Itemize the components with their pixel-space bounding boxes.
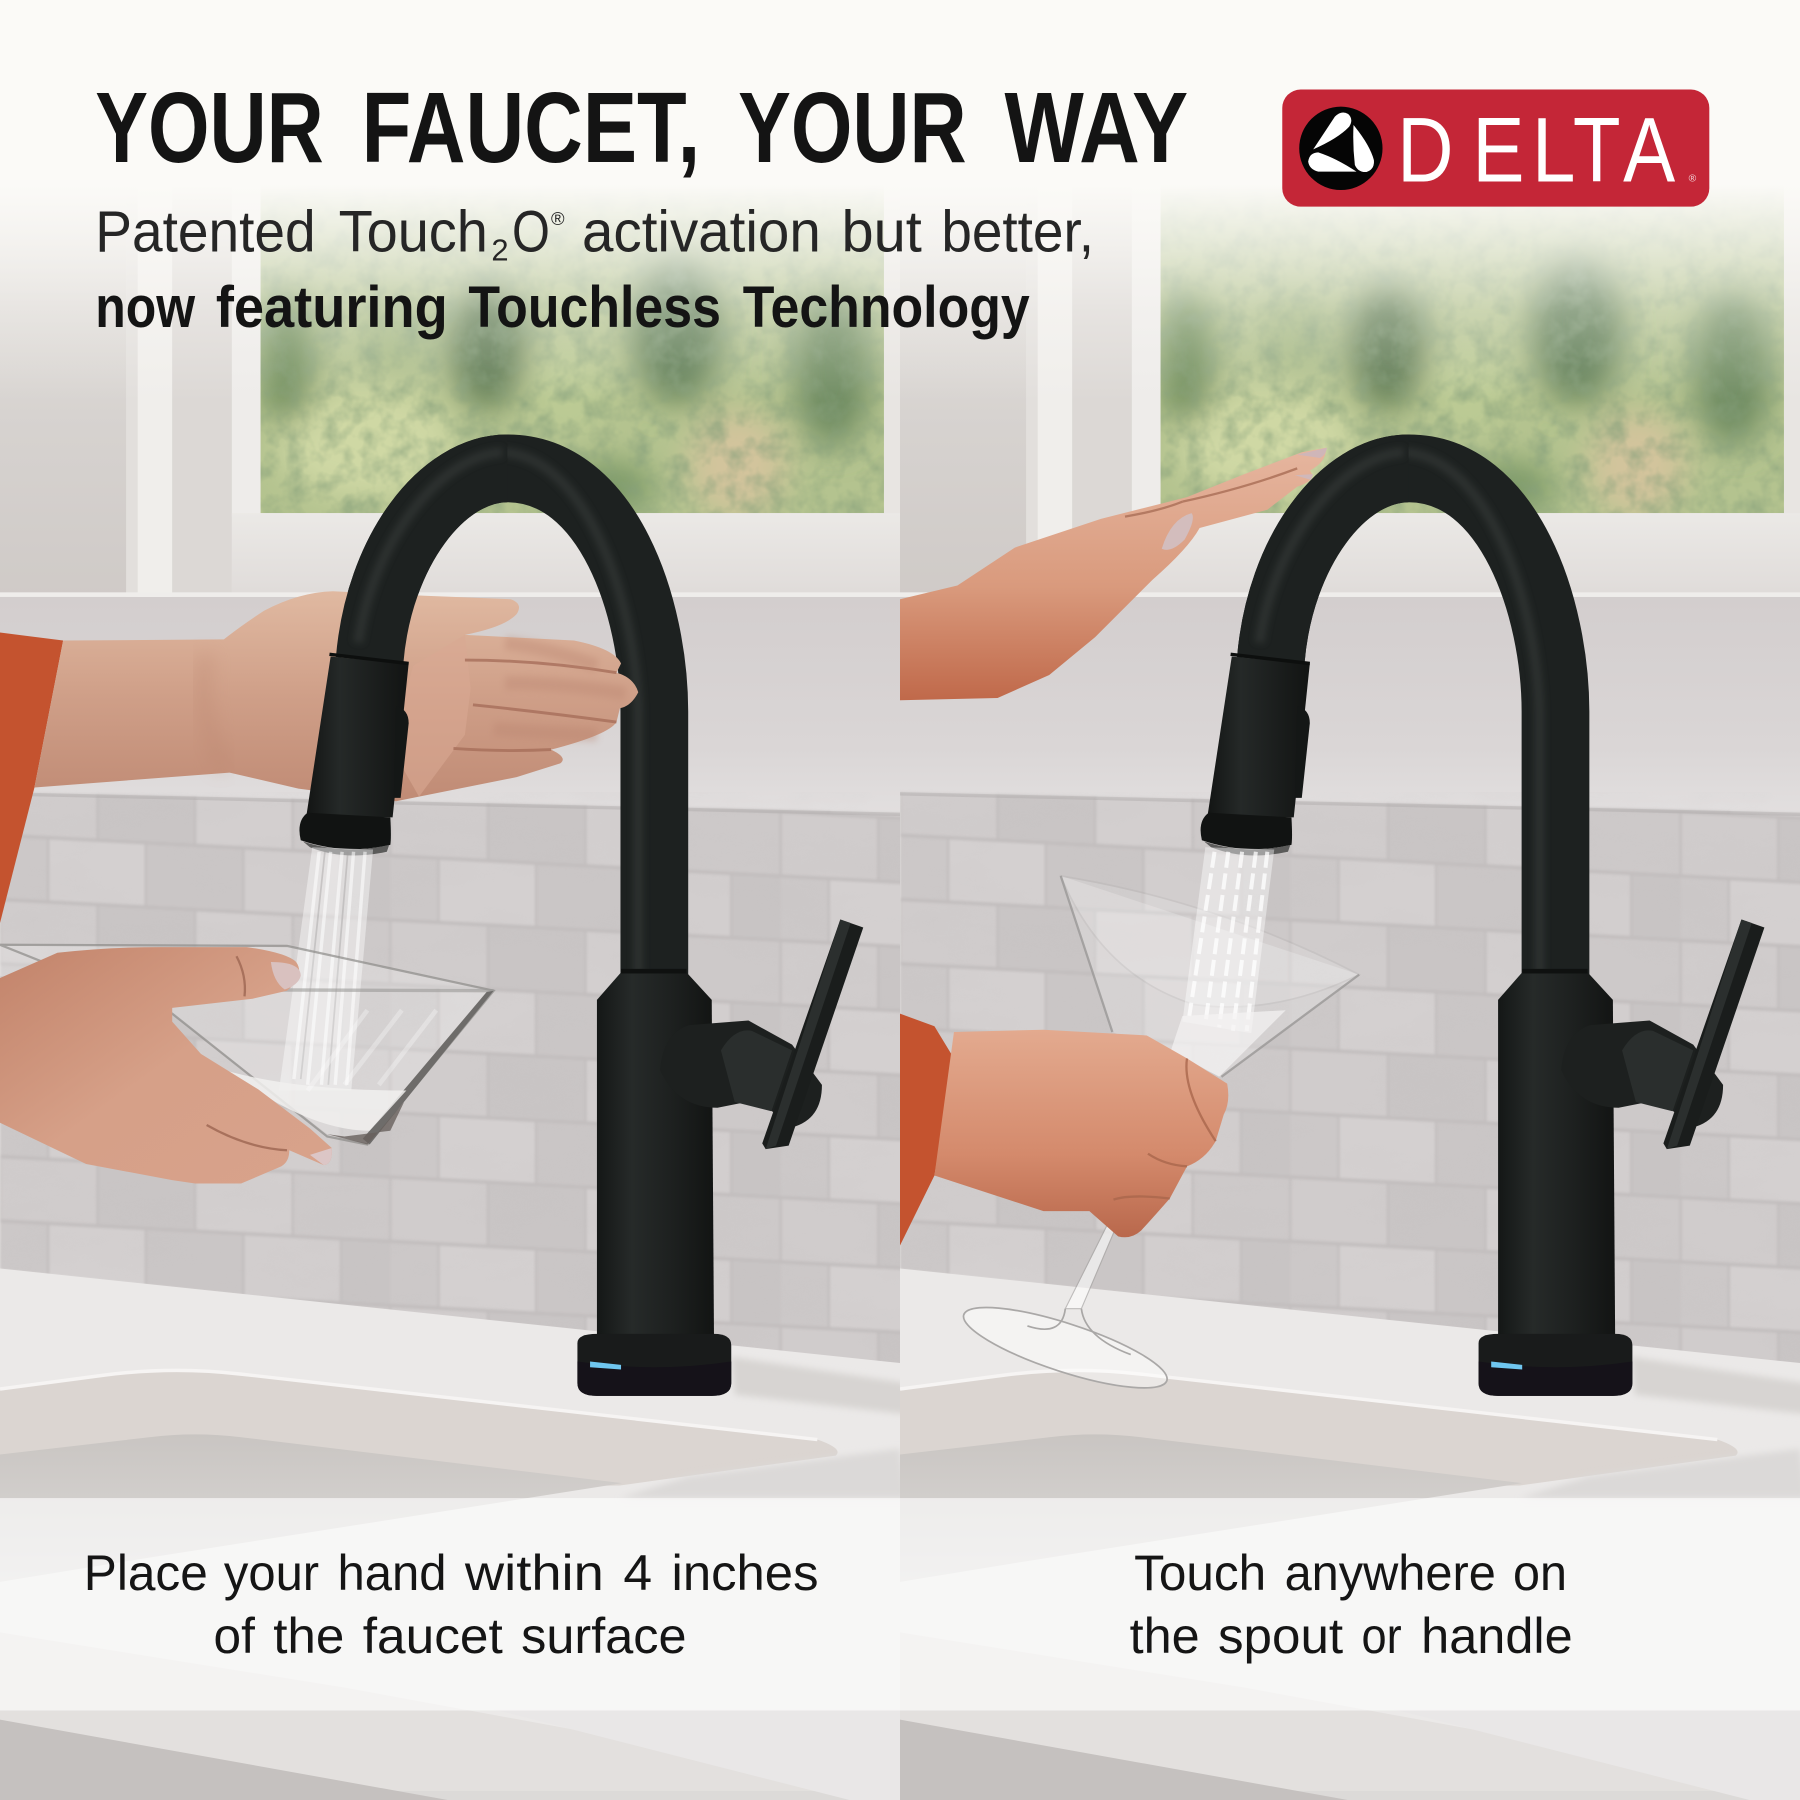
caption: right panel: the [1130, 1607, 1200, 1664]
subtitle, second line: Technology [743, 275, 1030, 340]
hand holding bowl [0, 947, 332, 1184]
subtitle, second line [95, 275, 1030, 340]
caption: left panel: inches [672, 1544, 818, 1601]
hand touching spout [900, 448, 1327, 700]
subtitle, first line: Patented [95, 199, 316, 264]
subtitle, first line: ® [551, 208, 565, 229]
caption: right panel: or [1361, 1607, 1402, 1664]
subtitle, first line [95, 199, 1094, 268]
martini glass stem and foot [962, 1226, 1168, 1389]
caption: right panel: anywhere [1285, 1544, 1496, 1601]
background scene: left panel [0, 199, 900, 1800]
orange sleeve, upper arm [0, 633, 63, 923]
caption: left panel: within [464, 1544, 604, 1601]
title: YOUR [738, 73, 967, 184]
caption: left panel: faucet [363, 1607, 503, 1664]
caption: left panel: hand [338, 1544, 447, 1601]
title: WAY [1004, 73, 1188, 184]
panel: right, touch activation [900, 448, 1764, 1404]
faucet body, left [358, 452, 863, 1396]
subtitle, second line: now [95, 275, 196, 340]
subtitle, first line: activation [582, 199, 821, 264]
title: FAUCET, [362, 73, 700, 184]
pull-down sprayer head, right [1201, 452, 1409, 855]
martini glass cone and water [1061, 847, 1359, 1077]
caption: left panel: Place [84, 1544, 208, 1601]
logo: Delta [1282, 90, 1709, 207]
caption: right panel: on [1513, 1544, 1567, 1601]
caption: left panel: of [214, 1607, 256, 1664]
caption: left panel: your [224, 1544, 319, 1601]
title: YOUR [95, 73, 324, 184]
water stream, left [279, 847, 373, 1091]
wordmark: DELTA [1397, 99, 1675, 202]
subtitle, first line: Touch [339, 199, 488, 264]
hand holding martini glass [934, 1030, 1228, 1237]
title [95, 73, 1188, 184]
subtitle, first line: better, [941, 199, 1094, 264]
subtitle, first line: 2 [491, 233, 509, 268]
caption: left panel: 4 [623, 1544, 652, 1601]
subtitle, second line: featuring [216, 275, 448, 340]
background scene: right panel [900, 199, 1800, 1800]
subtitle, second line: Touchless [468, 275, 721, 340]
caption: right panel [1130, 1544, 1573, 1664]
caption: left panel: the [273, 1607, 344, 1664]
subtitle, first line: but [841, 199, 922, 264]
pull-down sprayer head, left [299, 452, 507, 855]
faucet body, right [1259, 452, 1764, 1396]
caption: right panel: Touch [1134, 1544, 1266, 1601]
registered mark: ® [1689, 173, 1697, 184]
orange sleeve, lower arm [900, 1014, 954, 1246]
caption: left panel [84, 1544, 818, 1664]
subtitle, first line: O [512, 199, 550, 264]
panel: left, hover activation [0, 452, 863, 1396]
caption: right panel: spout [1218, 1607, 1343, 1664]
open hand near faucet [34, 591, 638, 801]
caption: left panel: surface [521, 1607, 686, 1664]
icon: Delta tri-petal mark [1299, 107, 1383, 190]
glass bowl [0, 945, 494, 1145]
caption: right panel: handle [1421, 1607, 1573, 1664]
